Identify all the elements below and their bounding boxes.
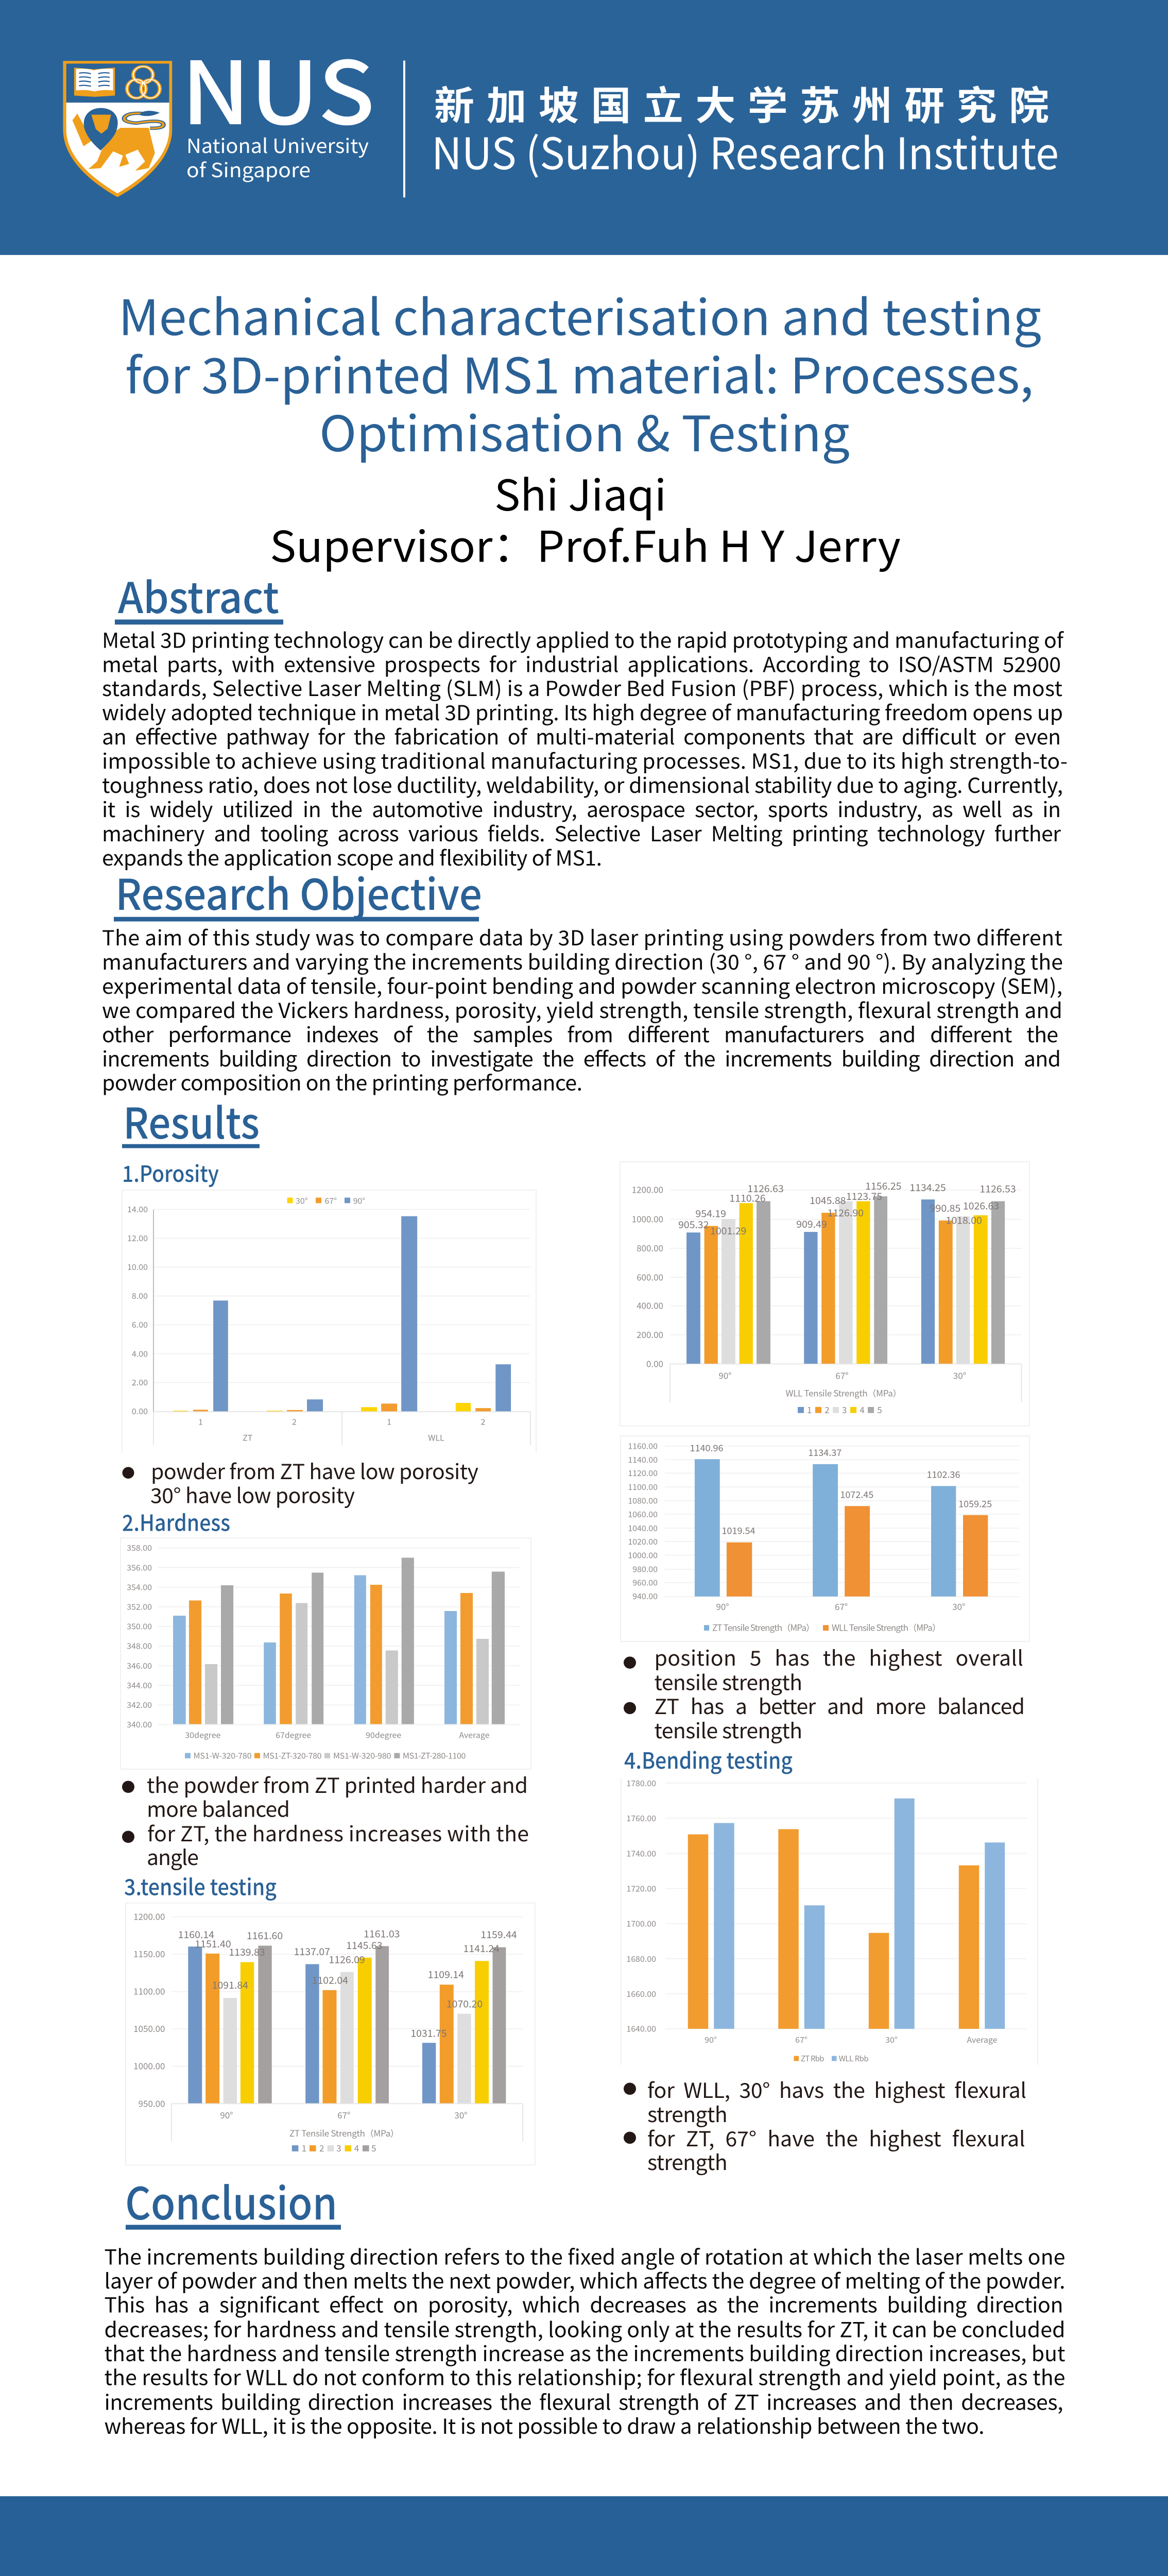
- bars: [188, 1946, 506, 2103]
- legend: [794, 2053, 869, 2064]
- supervisor: Supervisor：Prof.Fuh H Y Jerry: [270, 513, 901, 574]
- heading: Research Objective: Research Objective: [115, 861, 482, 922]
- bars: [173, 1558, 505, 1724]
- axis labels: [632, 1183, 966, 1399]
- legend: 4: [860, 1403, 865, 1416]
- data labels: 1070.20: [446, 1996, 483, 2010]
- legend: [704, 1621, 941, 1633]
- data labels: 1156.25: [865, 1178, 901, 1193]
- axis labels: 4.00: [132, 1347, 148, 1359]
- text block: research objective: other performance indexes of the samples from different manufacturers and different the: [102, 1018, 1058, 1048]
- axis labels: ZT Tensile Strength（MPa）: [289, 2126, 399, 2139]
- axis labels: 950.00: [139, 2097, 165, 2110]
- axis labels: WLL: [428, 1432, 444, 1443]
- axis labels: 30°: [885, 2033, 898, 2045]
- data labels: 1072.45: [840, 1488, 873, 1501]
- legend: 3: [336, 2141, 341, 2154]
- axis labels: 67degree: [276, 1729, 311, 1741]
- data labels: 1137.07: [294, 1944, 330, 1958]
- axis labels: 12.00: [127, 1232, 148, 1244]
- bullets: bending findings: strength: [647, 2146, 728, 2176]
- legend: ZT Rbb: [801, 2053, 824, 2064]
- legend: 5: [877, 1403, 882, 1416]
- legend: MS1-W-320-780: [194, 1750, 252, 1761]
- data labels: 905.32: [678, 1217, 709, 1231]
- axis labels: 1660.00: [626, 1988, 656, 1999]
- bullets: porosity findings: [123, 1455, 478, 1509]
- axis labels: 1680.00: [626, 1953, 656, 1964]
- axis labels: 340.00: [127, 1718, 152, 1730]
- legend: 3: [842, 1403, 847, 1416]
- data labels: 1161.60: [247, 1928, 283, 1942]
- axis labels: 346.00: [127, 1659, 152, 1671]
- legend: ZT Tensile Strength（MPa）: [712, 1621, 815, 1633]
- axis labels: [626, 1777, 998, 2045]
- axis labels: 1080.00: [628, 1495, 658, 1506]
- axis labels: 1720.00: [626, 1883, 656, 1894]
- bullets: hardness findings: for ZT, the hardness increases with the: [147, 1818, 529, 1848]
- bars: [695, 1459, 988, 1597]
- axis labels: 2: [292, 1416, 297, 1428]
- data labels: 1102.04: [312, 1973, 348, 1987]
- National University of Singapore: of Singapore: [186, 155, 311, 183]
- data labels: 1134.37: [808, 1446, 841, 1459]
- axis labels: 1760.00: [626, 1812, 656, 1824]
- text block: conclusion: that the hardness and tensile strength increase as the increments building direction increases, but: [104, 2337, 1065, 2367]
- axis labels: [127, 1203, 485, 1443]
- title: for 3D-printed MS1 material: Processes,: [125, 337, 1034, 408]
- heading: 3.tensile testing: 3.tensile testing: [124, 1869, 277, 1902]
- data labels: 1126.90: [828, 1205, 864, 1219]
- data labels: 1139.83: [229, 1944, 265, 1959]
- axis labels: 960.00: [632, 1577, 658, 1588]
- text block: abstract: standards, Selective Laser Melting (SLM) is a Powder Bed Fusion (PBF) process, which is the most: [102, 672, 1062, 702]
- bullets: bending findings: for ZT, 67° have the highest flexural: [647, 2122, 1025, 2153]
- text block: conclusion: whereas for WLL, it is the opposite. It is not possible to draw a relationship between the two.: [104, 2410, 984, 2440]
- axis labels: 352.00: [127, 1600, 152, 1612]
- legend: 1: [807, 1403, 812, 1416]
- data labels: 1001.29: [710, 1223, 746, 1238]
- axis labels: 344.00: [127, 1679, 152, 1691]
- axis labels: 1000.00: [133, 2059, 165, 2072]
- axis labels: 980.00: [632, 1563, 658, 1575]
- axis labels: 30°: [454, 2108, 468, 2121]
- axis labels: 1120.00: [628, 1467, 658, 1479]
- bars: [173, 1216, 511, 1411]
- axis labels: 940.00: [632, 1590, 658, 1602]
- legend: WLL Tensile Strength（MPa）: [832, 1621, 941, 1633]
- text block: abstract: Metal 3D printing technology can be directly applied to the rapid prototyping and manufacturing of: [102, 624, 1064, 654]
- legend: 67°: [324, 1195, 337, 1206]
- panel: WLL tensile strength chart: [620, 1162, 1029, 1426]
- legend: 4: [354, 2141, 359, 2154]
- data labels: [178, 1926, 517, 2040]
- divider: [403, 61, 405, 197]
- axis labels: 90°: [220, 2108, 233, 2121]
- axis labels: 354.00: [127, 1581, 152, 1592]
- text block: abstract: impossible to achieve using traditional manufacturing processes. MS1, due to its high strength-to-: [102, 745, 1068, 775]
- axis labels: 30°: [953, 1369, 966, 1381]
- legend: 1: [302, 2141, 306, 2154]
- data labels: 1126.09: [329, 1952, 365, 1966]
- axis labels: 0.00: [646, 1357, 663, 1369]
- data labels: 1059.25: [958, 1497, 992, 1510]
- text block: research objective: increments building direction to investigate the effects of the increments building direction and: [102, 1042, 1061, 1073]
- axis labels: 1200.00: [632, 1183, 663, 1196]
- data labels: 1161.03: [364, 1926, 400, 1940]
- axis labels: 342.00: [127, 1699, 152, 1710]
- legend: [798, 1403, 882, 1416]
- axis labels: 600.00: [637, 1270, 663, 1283]
- icon: NUS shield crest: [63, 61, 172, 197]
- bullets: tensile findings: position 5 has the highest overall: [654, 1642, 1023, 1672]
- axis labels: 1000.00: [628, 1549, 658, 1561]
- text block: abstract: an effective pathway for the fabrication of multi-material components that are difficult or even: [102, 721, 1061, 751]
- legend: 5: [371, 2141, 376, 2154]
- data labels: 1134.25: [909, 1180, 946, 1194]
- data labels: 1109.14: [428, 1967, 464, 1981]
- text block: research objective: [102, 922, 1063, 1097]
- axis labels: 200.00: [637, 1328, 663, 1341]
- title: Mechanical characterisation and testing: [118, 279, 1041, 349]
- text block: conclusion: This has a significant effect on porosity, which decreases as the increments building direction: [104, 2289, 1063, 2318]
- data labels: [678, 1178, 1016, 1238]
- panel: bending strength chart: [621, 1777, 1038, 2065]
- axis labels: 67°: [337, 2108, 350, 2121]
- title: Optimisation & Testing: [319, 395, 850, 466]
- data labels: 1141.24: [463, 1941, 500, 1955]
- axis labels: 90°: [718, 1369, 732, 1381]
- axis labels: 1160.00: [628, 1440, 658, 1452]
- legend: 2: [319, 2141, 324, 2154]
- axis labels: 1: [198, 1416, 203, 1428]
- data labels: 1018.00: [946, 1213, 982, 1227]
- data labels: 1019.54: [722, 1523, 755, 1537]
- axis labels: 67°: [835, 1369, 849, 1381]
- text block: conclusion: decreases; for hardness and tensile strength, looking only at the results for ZT, it can be concluded: [104, 2313, 1065, 2343]
- axis labels: 90°: [705, 2033, 717, 2045]
- axis labels: 10.00: [127, 1261, 148, 1273]
- data labels: 1045.88: [810, 1193, 846, 1207]
- axis labels: 90degree: [366, 1729, 401, 1741]
- text block: abstract: it is widely utilized in the automotive industry, aerospace sector, sports industry, as well as in: [102, 793, 1061, 823]
- bullets: tensile findings: ZT has a better and more balanced: [654, 1690, 1025, 1720]
- bullets: tensile findings: tensile strength: [654, 1715, 802, 1744]
- axis labels: 348.00: [127, 1640, 152, 1652]
- axis labels: 1100.00: [628, 1481, 658, 1493]
- axis labels: 350.00: [127, 1620, 152, 1632]
- text block: conclusion: The increments building direction refers to the fixed angle of rotation at which the laser melts one: [104, 2241, 1065, 2270]
- axis labels: 1150.00: [133, 1947, 165, 1960]
- National University of Singapore: [186, 130, 369, 183]
- data labels: 1126.63: [747, 1181, 784, 1195]
- axis labels: 30degree: [185, 1729, 221, 1741]
- axis labels: 14.00: [127, 1203, 148, 1215]
- data labels: 1110.26: [729, 1191, 766, 1205]
- data labels: 954.19: [695, 1206, 726, 1220]
- panel: ZT tensile strength chart: [126, 1903, 535, 2165]
- axis labels: 1020.00: [628, 1535, 658, 1547]
- data labels: 1026.63: [963, 1198, 999, 1212]
- axis labels: 1700.00: [626, 1918, 656, 1929]
- heading: 2.Hardness: 2.Hardness: [122, 1505, 230, 1537]
- axis labels: 356.00: [127, 1561, 152, 1573]
- text block: abstract: widely adopted technique in metal 3D printing. Its high degree of manufacturing freedom opens up: [102, 697, 1063, 726]
- axis labels: 1780.00: [626, 1777, 656, 1789]
- legend: [287, 1195, 365, 1206]
- panel: porosity bar chart: [122, 1190, 536, 1453]
- bullets: porosity findings: 30° have low porosity: [150, 1479, 355, 1509]
- legend: [292, 2141, 376, 2154]
- panel: hardness bar chart: [121, 1538, 531, 1769]
- heading: Conclusion: Conclusion: [125, 2168, 337, 2233]
- English institute name: NUS (Suzhou) Research Institute: [432, 118, 1059, 182]
- axis labels: 67°: [835, 1600, 848, 1613]
- bullets: hardness findings: the powder from ZT printed harder and: [147, 1769, 528, 1799]
- bars: [686, 1196, 1005, 1364]
- heading: Abstract: Abstract: [118, 564, 279, 625]
- header banner: [0, 0, 1168, 255]
- axis labels: 1200.00: [133, 1910, 165, 1922]
- axis labels: 1640.00: [626, 2023, 656, 2035]
- legend: MS1-W-320-980: [333, 1750, 391, 1761]
- axis labels: 1740.00: [626, 1848, 656, 1859]
- axis labels: WLL Tensile Strength（MPa）: [786, 1386, 901, 1399]
- bullets: tensile findings: tensile strength: [654, 1666, 802, 1697]
- text block: research objective: manufacturers and varying the increments building direction (30 °, 67 ° and 90 °). By analyzing the: [102, 945, 1063, 976]
- National University of Singapore: National University: [186, 130, 369, 159]
- bars: [688, 1799, 1005, 2029]
- axis labels: Average: [459, 1729, 490, 1741]
- legend: MS1-ZT-280-1100: [403, 1750, 466, 1761]
- panel: ZT vs WLL average tensile chart: [621, 1436, 1029, 1641]
- axis labels: 1140.00: [628, 1453, 658, 1465]
- axis labels: 67°: [795, 2033, 808, 2045]
- axis labels: 0.00: [132, 1405, 148, 1417]
- bullets: tensile findings: [624, 1642, 1025, 1744]
- axis labels: 6.00: [132, 1318, 148, 1330]
- axis labels: 2: [481, 1416, 485, 1428]
- text block: conclusion: increments building direction increases the flexural strength of ZT increases and then decreases,: [104, 2386, 1063, 2416]
- text block: abstract: [102, 624, 1068, 872]
- heading: 1.Porosity: 1.Porosity: [122, 1156, 219, 1189]
- axis labels: 90°: [716, 1600, 729, 1613]
- data labels: 1160.14: [178, 1927, 214, 1941]
- text block: abstract: metal parts, with extensive prospects for industrial applications. According to ISO/ASTM 52900: [102, 648, 1061, 678]
- axis labels: 358.00: [127, 1541, 152, 1553]
- data labels: 1159.44: [480, 1927, 517, 1941]
- bullets: porosity findings: powder from ZT have low porosity: [151, 1455, 478, 1485]
- text block: research objective: The aim of this study was to compare data by 3D laser printing using powders from two different: [102, 922, 1062, 952]
- text block: conclusion: [104, 2241, 1065, 2440]
- author: Shi Jiaqi: [494, 462, 666, 523]
- axis labels: 1060.00: [628, 1508, 658, 1520]
- data labels: 1126.53: [980, 1181, 1016, 1195]
- legend: 2: [825, 1403, 830, 1416]
- bullets: hardness findings: angle: [147, 1841, 199, 1871]
- data labels: [690, 1441, 992, 1537]
- legend: [185, 1750, 466, 1761]
- axis labels: 30°: [952, 1600, 965, 1613]
- axis labels: [127, 1541, 490, 1741]
- text block: abstract: machinery and tooling across various fields. Selective Laser Melting printing technology further: [102, 817, 1061, 848]
- Chinese institute name: 新加坡国立大学苏州研究院: [434, 74, 1049, 131]
- data labels: 1031.75: [410, 2026, 447, 2040]
- bullets: hardness findings: more balanced: [147, 1793, 290, 1823]
- footer band: [0, 2496, 1168, 2576]
- axis labels: 1040.00: [628, 1522, 658, 1534]
- legend: WLL Rbb: [839, 2053, 869, 2064]
- axis labels: Average: [967, 2033, 998, 2045]
- data labels: 909.49: [796, 1216, 827, 1231]
- data labels: 1091.84: [212, 1977, 248, 1992]
- legend: 90°: [353, 1195, 365, 1206]
- text block: abstract: expands the application scope and flexibility of MS1.: [102, 841, 602, 872]
- bullets: bending findings: strength: [647, 2098, 728, 2128]
- data labels: 1102.36: [927, 1468, 960, 1481]
- axis labels: 1100.00: [133, 1985, 165, 1997]
- bullets: bending findings: for WLL, 30° havs the highest flexural: [647, 2074, 1026, 2104]
- data labels: 1140.96: [690, 1441, 724, 1454]
- axis labels: 400.00: [637, 1299, 663, 1312]
- text block: research objective: we compared the Vickers hardness, porosity, yield strength, tensile strength, flexural strength and: [102, 994, 1062, 1024]
- axis labels: 1000.00: [632, 1212, 663, 1225]
- bullets: bending findings: [624, 2074, 1026, 2176]
- axis labels: 2.00: [132, 1376, 148, 1388]
- axis labels: 800.00: [637, 1241, 663, 1254]
- bullets: hardness findings: [122, 1769, 529, 1871]
- legend: MS1-ZT-320-780: [263, 1750, 321, 1761]
- data labels: 1123.75: [846, 1189, 882, 1203]
- axis labels: 8.00: [132, 1290, 148, 1301]
- data labels: 1151.40: [195, 1936, 231, 1951]
- NUS wordmark: NUS: [181, 24, 375, 150]
- data labels: 990.85: [930, 1200, 960, 1215]
- text block: abstract: toughness ratio, does not lose ductility, weldability, or dimensional stability due to aging. Currently,: [102, 769, 1063, 799]
- axis labels: [628, 1440, 965, 1613]
- axis labels: 1050.00: [133, 2022, 165, 2035]
- text block: conclusion: the results for WLL do not conform to this relationship; for flexural strength and yield point, as the: [104, 2361, 1065, 2391]
- heading: 4.Bending testing: 4.Bending testing: [624, 1742, 793, 1775]
- data labels: 1145.63: [346, 1938, 383, 1952]
- axis labels: 1: [387, 1416, 391, 1428]
- axis labels: ZT: [243, 1432, 252, 1443]
- axis labels: [133, 1910, 468, 2139]
- heading: Results: Results: [123, 1090, 260, 1151]
- text block: research objective: experimental data of tensile, four-point bending and powder scanning electron microscopy (SEM),: [102, 970, 1062, 1000]
- title: [118, 279, 1041, 466]
- legend: 30°: [296, 1195, 308, 1206]
- text block: conclusion: layer of powder and then melts the next powder, which affects the degree of melting of the powder.: [104, 2264, 1065, 2295]
- text block: research objective: powder composition on the printing performance.: [102, 1066, 582, 1097]
